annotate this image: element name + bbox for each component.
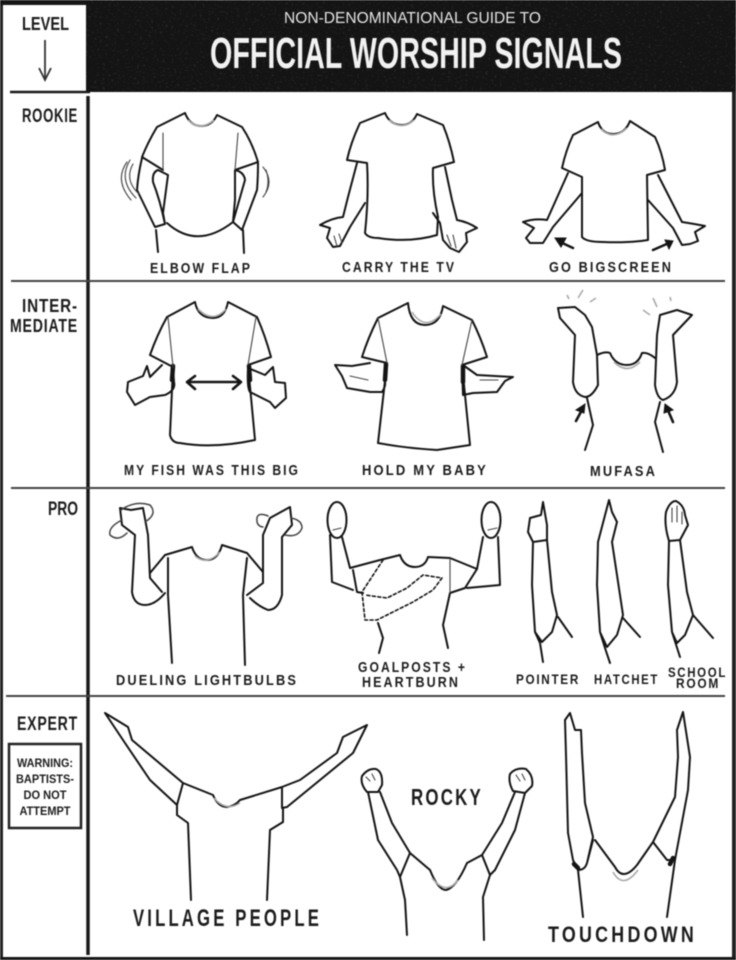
figure: my fish was this big: MY FISH WAS THIS BIG — [124, 462, 300, 479]
figure: rocky: ROCKY — [411, 784, 483, 810]
figure: go bigscreen — [523, 121, 705, 276]
level label: pro: PRO — [48, 499, 78, 520]
icon: double arrow — [187, 376, 241, 389]
figure: school room — [665, 501, 727, 691]
level label: expert: EXPERT — [17, 714, 78, 735]
figure: mufasa — [558, 290, 692, 480]
figure: school room: ROOM — [676, 675, 720, 691]
panel: rookie — [22, 106, 705, 277]
figure: dueling lightbulbs — [110, 503, 302, 689]
figure: touchdown: TOUCHDOWN — [548, 922, 697, 947]
figure: pointer: POINTER — [516, 671, 580, 687]
icon: outward arrows — [555, 238, 673, 250]
figure: carry the tv — [320, 113, 477, 276]
level column header: LEVEL — [22, 14, 69, 34]
level column header — [22, 14, 69, 80]
figure: village people — [105, 713, 367, 932]
callout: warning: ATTEMPT — [20, 804, 71, 818]
level label line 2: MEDIATE — [10, 316, 78, 336]
panel: pro — [48, 499, 727, 691]
title banner — [86, 0, 736, 92]
callout: warning: DO NOT — [24, 788, 67, 802]
level label: intermediate: INTER- — [22, 296, 78, 316]
figure: hatchet: HATCHET — [594, 671, 659, 687]
panel: intermediate — [10, 290, 692, 480]
figure: dueling lightbulbs: DUELING LIGHTBULBS — [116, 672, 298, 689]
panel: expert — [9, 712, 697, 947]
figure: pointer — [516, 502, 580, 687]
callout: warning: BAPTISTS- — [16, 772, 74, 786]
level label: rookie: ROOKIE — [22, 106, 78, 127]
figure: hold my baby — [335, 303, 513, 479]
figure: rocky — [362, 769, 532, 940]
figure: goalposts + heartburn: GOALPOSTS + — [358, 659, 467, 676]
icon: level down arrow — [39, 40, 51, 80]
icon: upward arrows — [576, 404, 673, 422]
figure: village people: VILLAGE PEOPLE — [133, 905, 322, 932]
figure: mufasa: MUFASA — [590, 463, 657, 480]
figure: hold my baby: HOLD MY BABY — [362, 462, 488, 479]
callout: warning — [9, 744, 81, 828]
figure: hatchet — [594, 500, 659, 687]
callout: warning: WARNING: — [17, 756, 73, 770]
figure: elbow flap — [121, 113, 269, 277]
figure: carry the tv: CARRY THE TV — [342, 259, 456, 276]
figure: go bigscreen: GO BIGSCREEN — [549, 259, 673, 276]
title banner: NON-DENOMINATIONAL GUIDE TO — [284, 10, 541, 27]
figure: goalposts + heartburn: HEARTBURN — [362, 674, 460, 691]
figure: my fish was this big — [124, 302, 300, 479]
figure: goalposts + heartburn — [328, 502, 500, 691]
figure: elbow flap: ELBOW FLAP — [150, 260, 252, 277]
figure: touchdown — [548, 712, 697, 947]
